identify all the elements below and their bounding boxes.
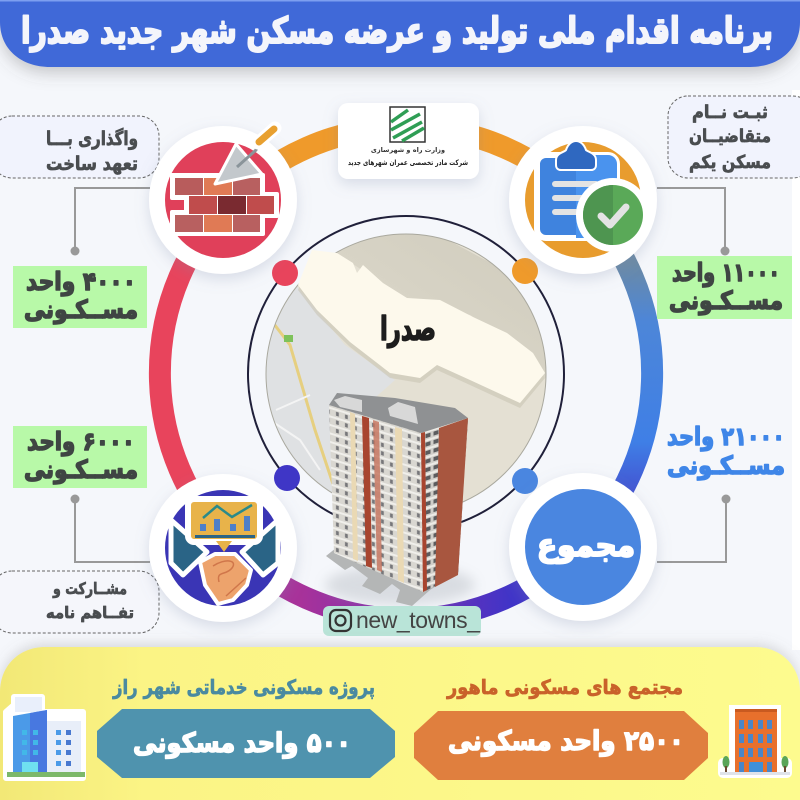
value: 21000 units: مســکـونی — [667, 451, 785, 481]
value: 4000 units: مســکـونی — [24, 295, 138, 325]
value: 4000 units: ۴۰۰۰ واحد — [26, 267, 136, 297]
icon: blue office building — [6, 697, 85, 778]
icon: total badge: مجموع — [537, 528, 635, 564]
value: 21000 units: ۲۱۰۰۰ واحد — [667, 422, 785, 452]
note: registration: ثبـت نــام — [692, 102, 768, 123]
connector: registration — [657, 188, 730, 256]
note: partnership — [0, 571, 159, 633]
instagram handle: new_towns_ — [356, 607, 481, 633]
note: partnership: مشــارکت و — [52, 579, 127, 598]
logo card: شرکت مادر تخصصی عمران شهرهای جدید — [348, 158, 468, 167]
footer panel — [0, 647, 800, 800]
value: 11000 units — [657, 256, 792, 319]
icon: orange apartment building — [718, 708, 792, 778]
note: brick: تعهد ساخت — [46, 153, 138, 175]
project: mahour: ۲۵۰۰ واحد مسکونی — [448, 726, 684, 757]
note: partnership: تفــاهم نامه — [46, 603, 134, 622]
logo card — [338, 103, 479, 179]
note: registration: متقاضیــان — [689, 126, 771, 147]
instagram handle — [323, 606, 481, 636]
panel: registration step — [509, 96, 800, 319]
project: shahr-e raz: ۵۰۰ واحد مسکونی — [133, 728, 351, 759]
project: mahour — [414, 675, 708, 780]
ring dots — [272, 258, 538, 494]
icon: brick wall and trowel — [149, 126, 297, 274]
value: 11000 units: مســکـونی — [669, 286, 783, 316]
tower illustration — [325, 393, 475, 606]
icon: total badge — [509, 473, 657, 621]
central map — [248, 216, 564, 532]
value: 6000 units: ۶۰۰۰ واحد — [27, 427, 135, 457]
logo card: وزارت راه و شهرسازی — [371, 146, 445, 154]
project: shahr-e raz — [97, 675, 395, 778]
title banner — [0, 0, 800, 67]
icon: handshake and chart — [149, 474, 297, 622]
note: registration: مسکن یکم — [689, 152, 771, 173]
panel: brick step — [0, 116, 297, 328]
icon: clipboard with check — [509, 126, 657, 274]
value: 6000 units — [13, 426, 147, 488]
connector: brick — [70, 188, 150, 256]
note: brick: واگذاری بـــا — [46, 127, 138, 150]
project: mahour: مجتمع های مسکونی ماهور — [446, 675, 683, 699]
progress ring — [160, 127, 652, 619]
value: 4000 units — [13, 266, 147, 328]
note: registration — [668, 96, 800, 178]
value: 6000 units: مســکـونی — [24, 455, 138, 485]
connector: partnership — [70, 494, 150, 562]
panel: partnership step — [0, 426, 297, 633]
project: shahr-e raz: پروژه مسکونی خدماتی شهر راز — [112, 675, 375, 700]
central map: صدرا — [380, 309, 436, 348]
value: 11000 units: ۱۱۰۰۰ واحد — [672, 258, 780, 288]
note: brick — [0, 116, 159, 178]
value: 21000 units — [667, 422, 785, 481]
panel: total — [509, 422, 785, 621]
connector: total — [657, 494, 730, 562]
